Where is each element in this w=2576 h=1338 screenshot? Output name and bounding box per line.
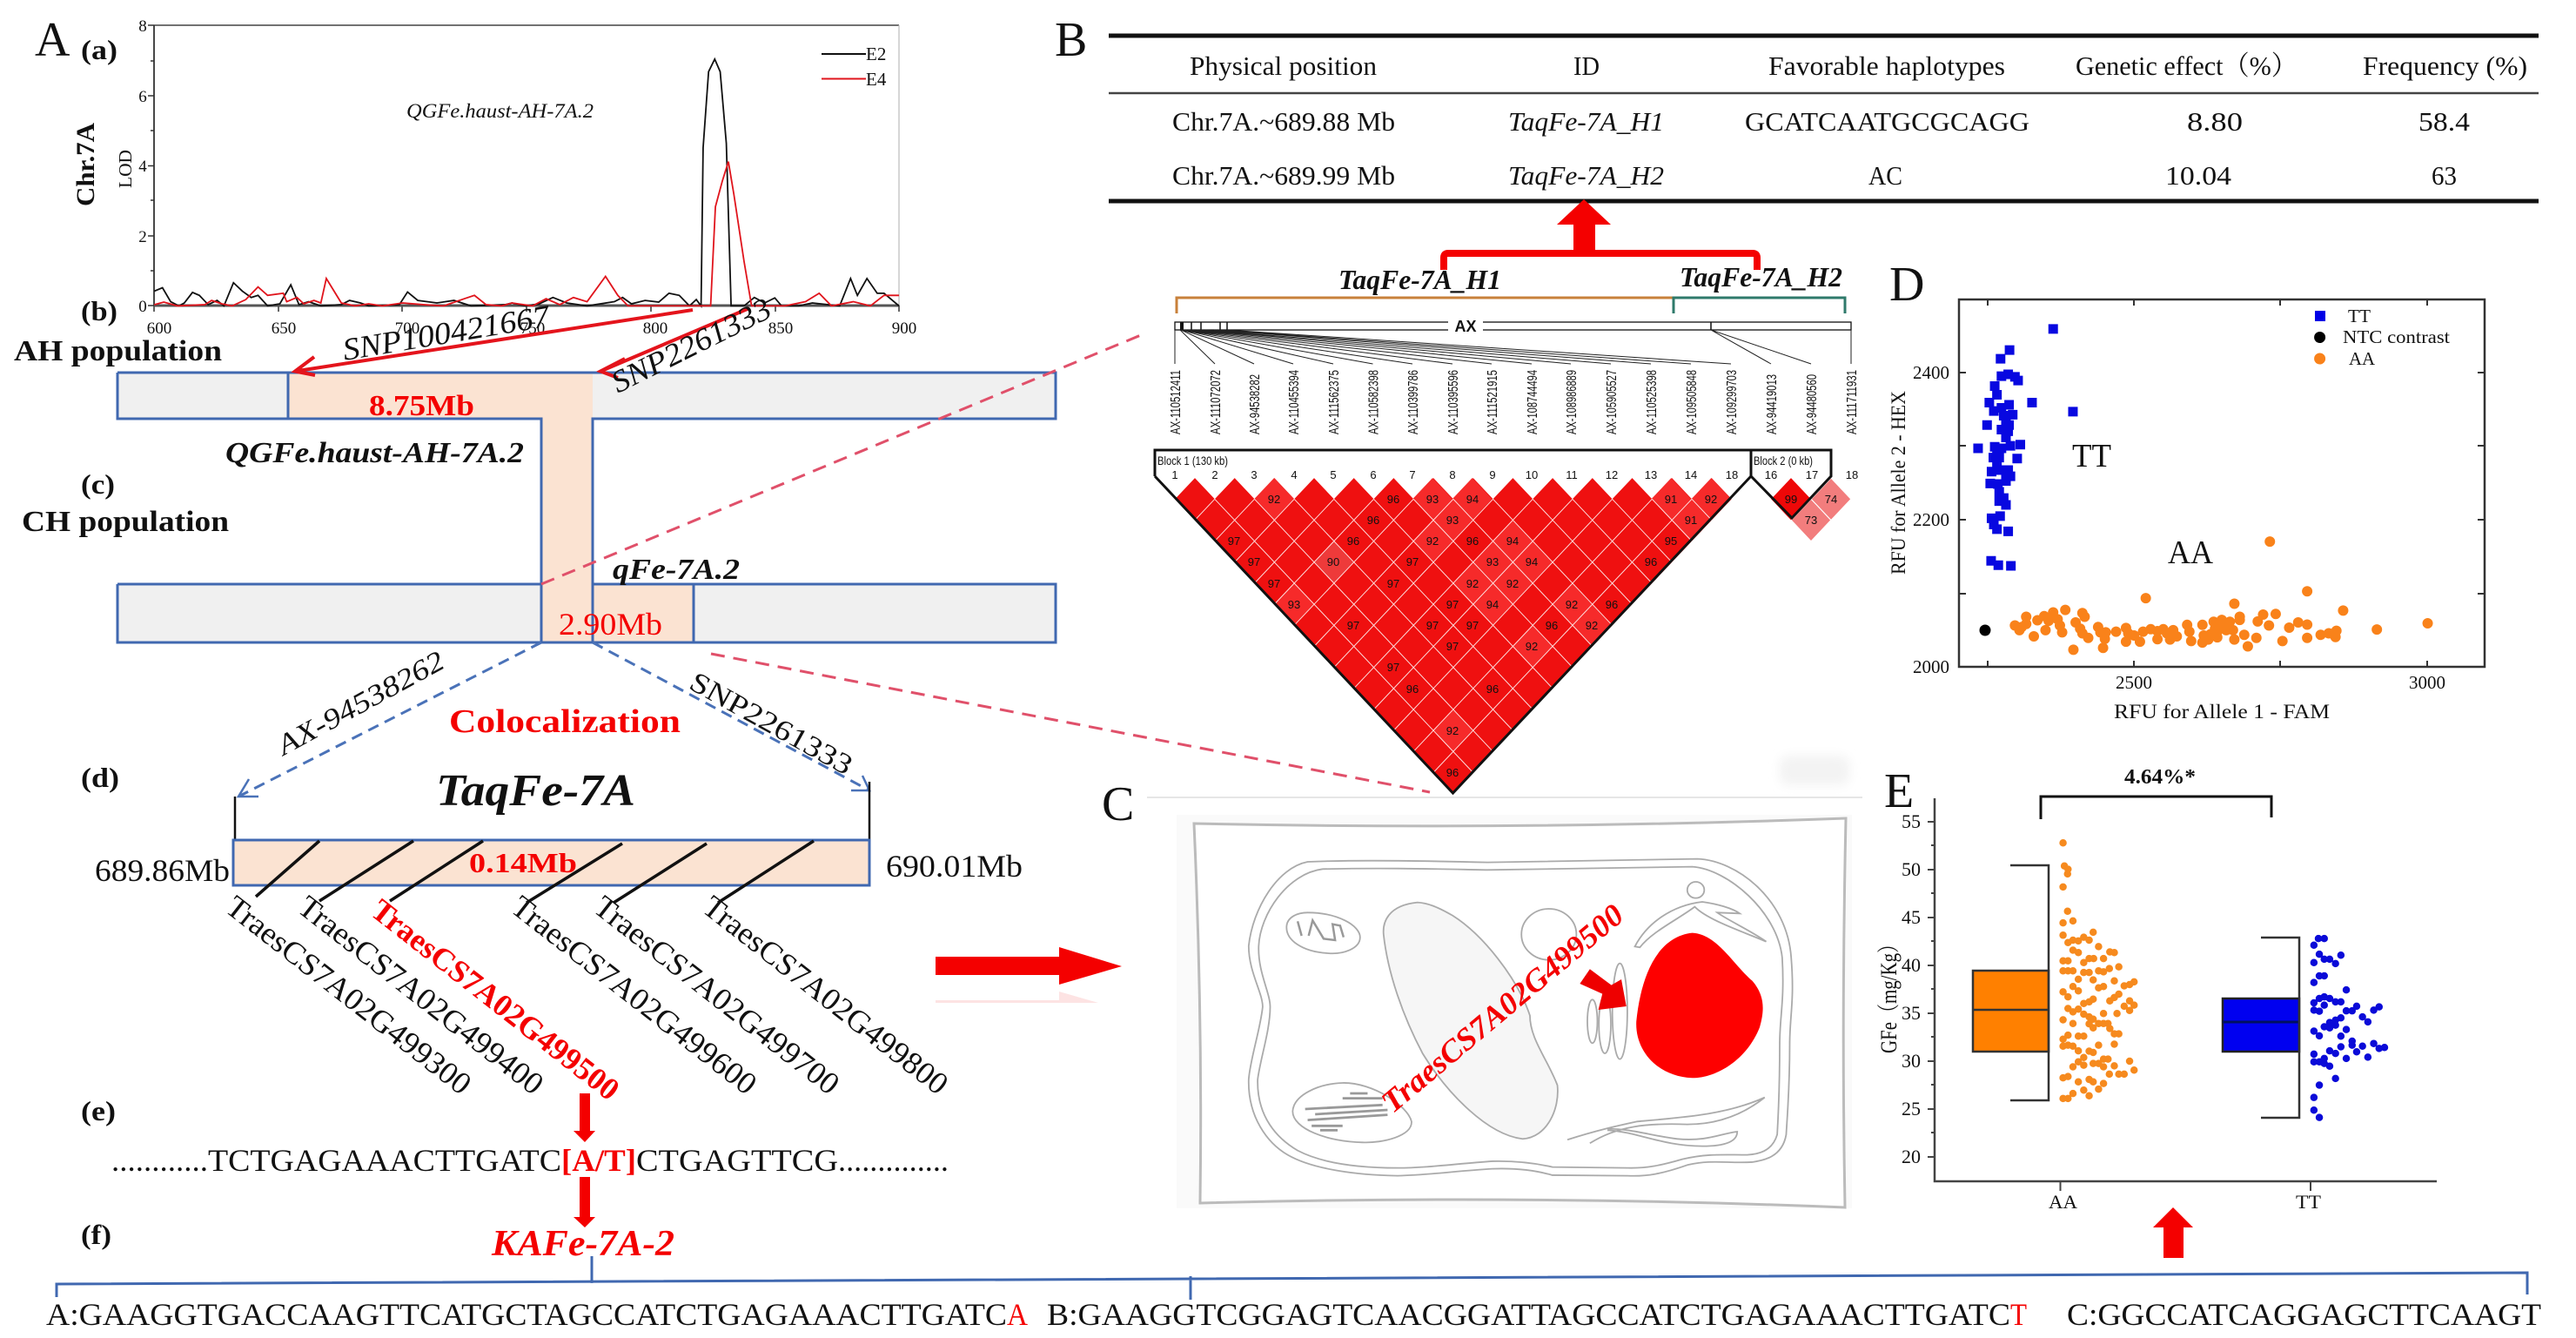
- marker numbers: 3: [1251, 468, 1258, 481]
- LD values: 92: [1526, 640, 1538, 653]
- box plot axes: [1902, 798, 2437, 1213]
- y tick labels: [138, 17, 147, 316]
- haplotype table: Chr.7A.~689.88 Mb: [1172, 106, 1395, 137]
- marker numbers: 16: [1765, 468, 1777, 481]
- block 2 cells: [1771, 478, 1811, 521]
- SNP marker labels: AX-109299703: [1725, 370, 1740, 434]
- marker numbers: 9: [1489, 468, 1496, 481]
- LD values: 93: [1446, 514, 1459, 527]
- LD values: 96: [1606, 598, 1618, 611]
- box plot axes: 50: [1902, 858, 1921, 880]
- marker numbers: 4: [1291, 468, 1298, 481]
- marker numbers: 5: [1330, 468, 1337, 481]
- LD values: 94: [1506, 535, 1519, 548]
- marker label SNP100421667: SNP100421667: [340, 298, 553, 367]
- chloroplast: [1292, 1083, 1412, 1142]
- gene label in cell: TraesCS7A02G499500: [1374, 898, 1630, 1119]
- LD values: 95: [1665, 535, 1677, 548]
- SNP sequence line: ..............: [838, 1143, 949, 1178]
- x tick labels: 850: [768, 319, 793, 338]
- red arrows from chart to AH bar: [295, 308, 749, 378]
- LD values: 97: [1347, 619, 1359, 632]
- sublabel (c): (c): [81, 468, 115, 500]
- haplotype name H1: TaqFe-7A_H1: [1338, 264, 1501, 295]
- chromosome label: Chr.7A: [71, 123, 100, 206]
- SNP marker labels: AX-109505848: [1685, 370, 1700, 434]
- LD values: 97: [1387, 577, 1399, 590]
- marker numbers: 10: [1526, 468, 1538, 481]
- cell membrane: [1258, 867, 1783, 1168]
- LD values: 97: [1248, 555, 1260, 568]
- red arrow up from primers: [2153, 1207, 2193, 1258]
- SNP marker labels: AX-94538282: [1248, 374, 1263, 434]
- left position label: 689.86Mb: [95, 853, 230, 888]
- scatter legend: AA: [2349, 348, 2376, 369]
- AA box and whisker: [1973, 865, 2049, 1100]
- primer sequences: A: [1007, 1297, 1028, 1332]
- chart legend: E2: [866, 44, 886, 64]
- TT cluster label: TT: [2072, 438, 2111, 474]
- primer sequences: B:GAAGGTCGGAGTCAACGGATTAGCCATCTGAGAAACTTGATC: [1047, 1297, 2010, 1332]
- LD values: 93: [1426, 493, 1439, 506]
- 8.75Mb label: 8.75Mb: [369, 390, 474, 422]
- SNP marker labels: AX-111562375: [1327, 370, 1342, 434]
- x tick labels: 900: [892, 319, 916, 338]
- LD values: 97: [1268, 577, 1280, 590]
- LD values: 96: [1466, 535, 1479, 548]
- SNP marker labels: AX-111072072: [1209, 370, 1224, 434]
- red bracket arrow up to table: [1444, 199, 1757, 270]
- endoplasmic reticulum: [1635, 882, 1766, 947]
- LD values: 97: [1446, 598, 1459, 611]
- LD values: 97: [1446, 640, 1459, 653]
- qFe-7A.2 label: qFe-7A.2: [613, 554, 740, 586]
- primer sequences: T: [2010, 1297, 2027, 1332]
- candidate gene labels: TraesCS7A02G499500: [365, 892, 627, 1107]
- blue bracket for primers: [57, 1256, 2527, 1300]
- 0.14Mb label: 0.14Mb: [469, 847, 577, 878]
- box plot axes: 35: [1902, 1002, 1921, 1024]
- SNP marker labels: AX-110455394: [1287, 370, 1302, 434]
- teal bracket H2: [1674, 298, 1845, 313]
- LD values: 97: [1406, 555, 1419, 568]
- SNP sequence line: [111, 1143, 949, 1178]
- marker numbers: 18: [1726, 468, 1738, 481]
- haplotype table: ID: [1573, 50, 1600, 81]
- AA points: [2015, 541, 2428, 649]
- LD values: 74: [1825, 493, 1837, 506]
- candidate gene labels: TraesCS7A02G499800: [696, 889, 955, 1101]
- LD values: 97: [1387, 661, 1399, 674]
- LD values: 92: [1506, 577, 1519, 590]
- marker position bar: AX: [1454, 318, 1477, 335]
- x tick labels: [147, 319, 916, 338]
- AA value dots: [2063, 843, 2134, 1099]
- scatter legend: NTC contrast: [2343, 326, 2450, 347]
- significance label: 4.64%*: [2124, 766, 2196, 789]
- scatter legend: [2314, 306, 2450, 369]
- SNP sequence line: TCTGAGAAACTTGATC: [208, 1143, 561, 1178]
- significance bracket: [2041, 797, 2271, 819]
- TaqFe-7A title: TaqFe-7A: [436, 766, 635, 816]
- panel: C, plant cell localization: [1102, 777, 1852, 1208]
- SNP marker labels: AX-110395596: [1446, 370, 1461, 434]
- E4 red curve: [154, 162, 899, 306]
- marker numbers: 6: [1370, 468, 1377, 481]
- QTL name label: QGFe.haust-AH-7A.2: [225, 437, 524, 469]
- sublabel (f): (f): [81, 1219, 111, 1250]
- LD values: 91: [1685, 514, 1697, 527]
- E2 black curve: [154, 59, 899, 306]
- block labels: [1157, 454, 1813, 467]
- SNP marker labels: AX-110512411: [1169, 370, 1184, 434]
- x tick labels: 750: [520, 319, 545, 338]
- haplotype table: [1109, 36, 2539, 201]
- chart legend: E4: [866, 69, 887, 90]
- box plot axes: 45: [1902, 906, 1921, 928]
- sublabel (d): (d): [81, 762, 119, 793]
- SNP marker labels: AX-108986889: [1565, 370, 1580, 434]
- haplotype table: TaqFe-7A_H1: [1508, 106, 1664, 137]
- candidate gene labels: TraesCS7A02G499400: [292, 889, 550, 1101]
- haplotype table: 58.4: [2418, 106, 2471, 137]
- plant cell drawing: [1249, 859, 1793, 1176]
- LD values: 91: [1665, 493, 1677, 506]
- marker numbers: 2: [1211, 468, 1218, 481]
- marker numbers: 7: [1409, 468, 1416, 481]
- marker numbers: 12: [1606, 468, 1618, 481]
- x axis title: RFU for Allele 1 - FAM: [2114, 701, 2330, 723]
- y tick labels: 2: [138, 228, 147, 246]
- box plot axes: 40: [1902, 954, 1921, 976]
- LD values: [1228, 493, 1837, 779]
- LD values: 96: [1387, 493, 1399, 506]
- primer sequences: [46, 1297, 2541, 1332]
- TT box and whisker: [2223, 938, 2299, 1118]
- LOD line chart: [71, 17, 916, 338]
- orange bracket H1: [1177, 298, 1674, 313]
- LD values: 92: [1426, 535, 1439, 548]
- scatter legend: TT: [2348, 306, 2371, 326]
- LD values: 96: [1406, 682, 1419, 696]
- SNP marker labels: AX-110582398: [1366, 370, 1382, 434]
- KAFe-7A-2 marker name: KAFe-7A-2: [491, 1224, 674, 1264]
- marker numbers: 14: [1685, 468, 1697, 481]
- LD values: 96: [1446, 766, 1459, 779]
- red arrow to nucleus: [1580, 969, 1627, 1010]
- LD values: 73: [1805, 514, 1817, 527]
- LD values: 92: [1705, 493, 1717, 506]
- red dashed link to LD apex: [711, 654, 1430, 792]
- x tick labels: 650: [272, 319, 296, 338]
- chart legend: [822, 44, 887, 90]
- red arrow SNP to marker: [574, 1177, 595, 1227]
- AH population label: AH population: [14, 335, 222, 367]
- marker numbers: 18: [1846, 468, 1858, 481]
- x tick labels: 600: [147, 319, 171, 338]
- marker label AX-94538262: AX-94538262: [271, 645, 450, 763]
- y axis title: RFU for Allele 2 - HEX: [1888, 391, 1909, 575]
- SNP marker labels: AX-105905527: [1605, 370, 1620, 434]
- box plot axes: 30: [1902, 1050, 1921, 1072]
- LD values: 94: [1526, 555, 1538, 568]
- TaqFe-7A interval bar: [233, 782, 869, 903]
- lighter LD cells: [1254, 478, 1731, 751]
- SNP marker labels: AX-111711931: [1845, 370, 1860, 434]
- LD values: 93: [1288, 598, 1300, 611]
- LD values: 97: [1228, 535, 1240, 548]
- candidate gene labels: TraesCS7A02G499600: [505, 889, 763, 1101]
- marker label SNP2261333: SNP2261333: [606, 291, 777, 400]
- LD values: 97: [1466, 619, 1479, 632]
- sublabel (e): (e): [81, 1095, 116, 1126]
- haplotype table: Physical position: [1190, 50, 1378, 81]
- x tick labels: 700: [395, 319, 419, 338]
- LD values: 94: [1466, 493, 1479, 506]
- y tick labels: 8: [138, 17, 147, 36]
- panel: E, GFe box plot: [1876, 764, 2437, 1258]
- NTC point: [1979, 625, 1991, 635]
- TT value dots: [2314, 938, 2385, 1118]
- y tick labels: 4: [138, 158, 147, 176]
- scatter plot axes: 2000: [1913, 656, 1949, 677]
- haplotype table: TaqFe-7A_H2: [1508, 160, 1664, 191]
- SNP sequence line: CTGAGTTCG: [636, 1143, 838, 1178]
- haplotype table: Chr.7A.~689.99 Mb: [1172, 160, 1395, 191]
- marker numbers: 13: [1645, 468, 1657, 481]
- scatter plot axes: 2400: [1913, 362, 1949, 383]
- SNP marker labels: [1169, 370, 1860, 434]
- haplotype name H2: TaqFe-7A_H2: [1680, 261, 1842, 292]
- haplotype table: AC: [1868, 160, 1902, 191]
- box plot axes: 55: [1902, 810, 1921, 832]
- panel: D, KASP genotyping scatter plot: [1888, 258, 2485, 723]
- scatter plot axes: [1913, 299, 2485, 693]
- LOD curves in z coordinates: [154, 59, 899, 306]
- block labels: Block 1 (130 kb): [1157, 454, 1228, 467]
- LD values: 96: [1347, 535, 1359, 548]
- big red arrow to panel C: [936, 947, 1122, 1003]
- marker numbers: 11: [1566, 468, 1578, 481]
- LD values: 92: [1446, 724, 1459, 737]
- SNP marker labels: AX-110399786: [1406, 370, 1421, 434]
- 2.90Mb label: 2.90Mb: [559, 607, 662, 642]
- SNP sequence line: [A/T]: [561, 1143, 636, 1178]
- marker label SNP2261333 lower: SNP2261333: [684, 667, 857, 782]
- SNP marker labels: AX-110525398: [1645, 370, 1660, 434]
- x tick labels: 800: [643, 319, 667, 338]
- block labels: Block 2 (0 kb): [1754, 454, 1813, 467]
- candidate gene labels: TraesCS7A02G499300: [219, 889, 478, 1101]
- sublabel (a): (a): [81, 34, 117, 65]
- LD values: 92: [1586, 619, 1598, 632]
- red arrow gene to SNP: [574, 1093, 595, 1142]
- LD values: 96: [1486, 682, 1499, 696]
- TT points: [1978, 329, 2073, 566]
- LD values: 90: [1327, 555, 1339, 568]
- LD values: 92: [1566, 598, 1578, 611]
- LD values: 92: [1466, 577, 1479, 590]
- stacked vesicles: [1587, 964, 1627, 1059]
- AA cluster label: AA: [2168, 535, 2214, 571]
- haplotype table: Genetic effect（%）: [2076, 50, 2298, 81]
- SNP marker labels: AX-94480560: [1805, 374, 1820, 434]
- right position label: 690.01Mb: [886, 849, 1023, 884]
- white cell grid: [1195, 499, 1712, 773]
- LD values: 96: [1645, 555, 1657, 568]
- LD block outlines: [1155, 450, 1831, 793]
- candidate gene labels: TraesCS7A02G499700: [587, 889, 846, 1101]
- panel letter D: D: [1889, 258, 1924, 312]
- LD values: 97: [1426, 619, 1439, 632]
- haplotype table: Favorable haplotypes: [1768, 50, 2005, 81]
- y tick labels: 0: [138, 298, 147, 316]
- haplotype table: GCATCAATGCGCAGG: [1745, 106, 2029, 137]
- panel: B, haplotype table and LD plot: [1055, 13, 2539, 794]
- sublabel (b): (b): [81, 295, 117, 326]
- panel letter E: E: [1884, 764, 1914, 818]
- CH population label: CH population: [22, 506, 229, 538]
- marker numbers: 8: [1449, 468, 1456, 481]
- marker numbers: [1171, 468, 1858, 481]
- red nucleus: [1636, 933, 1763, 1078]
- panel letter C: C: [1102, 777, 1134, 831]
- cell wall: [1249, 859, 1793, 1176]
- scatter plot axes: 3000: [2409, 672, 2445, 693]
- haplotype table: Frequency (%): [2363, 50, 2527, 81]
- LD cells base: [1175, 478, 1732, 794]
- y tick labels: 6: [138, 88, 147, 106]
- golgi membranes: [1567, 1098, 1765, 1146]
- marker position bar: [1175, 318, 1851, 364]
- panel letter B: B: [1055, 13, 1087, 67]
- Colocalization heading: Colocalization: [449, 703, 681, 740]
- box plot axes: TT: [2296, 1191, 2322, 1213]
- box plot axes: 25: [1902, 1098, 1921, 1119]
- SNP marker labels: AX-94419013: [1765, 374, 1780, 434]
- y axis title: GFe（mg/Kg）: [1876, 935, 1902, 1053]
- LOD axis label: LOD: [115, 150, 136, 188]
- box plot axes: 20: [1902, 1146, 1921, 1167]
- LD values: 96: [1367, 514, 1379, 527]
- box plot axes: AA: [2049, 1191, 2077, 1213]
- haplotype table: 10.04: [2165, 160, 2232, 191]
- mitochondrion: [1286, 912, 1360, 953]
- primer sequences: C:GGCCATCAGGAGCTTCAAGT: [2067, 1297, 2541, 1332]
- LD values: 96: [1546, 619, 1558, 632]
- panel letter A: A: [35, 13, 70, 67]
- LD values: 93: [1486, 555, 1499, 568]
- scatter plot axes: 2500: [2116, 672, 2152, 693]
- LD values: 99: [1785, 493, 1797, 506]
- blue dashed zoom arrows: [238, 642, 869, 797]
- vacuole: [1384, 903, 1558, 1139]
- SNP marker labels: AX-108744494: [1526, 370, 1540, 434]
- lysosome: [1521, 909, 1576, 960]
- LD heatmap: [1155, 450, 1858, 794]
- QTL name in chart: QGFe.haust-AH-7A.2: [406, 100, 594, 122]
- SNP marker labels: AX-111521915: [1486, 370, 1500, 434]
- marker numbers: 1: [1171, 468, 1178, 481]
- LD values: 94: [1486, 598, 1499, 611]
- haplotype table: 63: [2432, 160, 2457, 191]
- marker numbers: 17: [1806, 468, 1818, 481]
- SNP sequence line: ............: [111, 1143, 208, 1178]
- haplotype table: 8.80: [2187, 106, 2243, 137]
- faint smudge and rule under LD plot: [1147, 756, 1862, 797]
- cell background paper: [1177, 815, 1852, 1208]
- red dashed link to LD plot: [541, 333, 1147, 584]
- candidate gene labels: [219, 889, 955, 1107]
- LD values: 92: [1268, 493, 1280, 506]
- scatter plot axes: 2200: [1913, 509, 1949, 530]
- chromosome bars with overlapping QTL region: [117, 373, 1056, 642]
- primer sequences: A:GAAGGTGACCAAGTTCATGCTAGCCATCTGAGAAACTTGATC: [46, 1297, 1007, 1332]
